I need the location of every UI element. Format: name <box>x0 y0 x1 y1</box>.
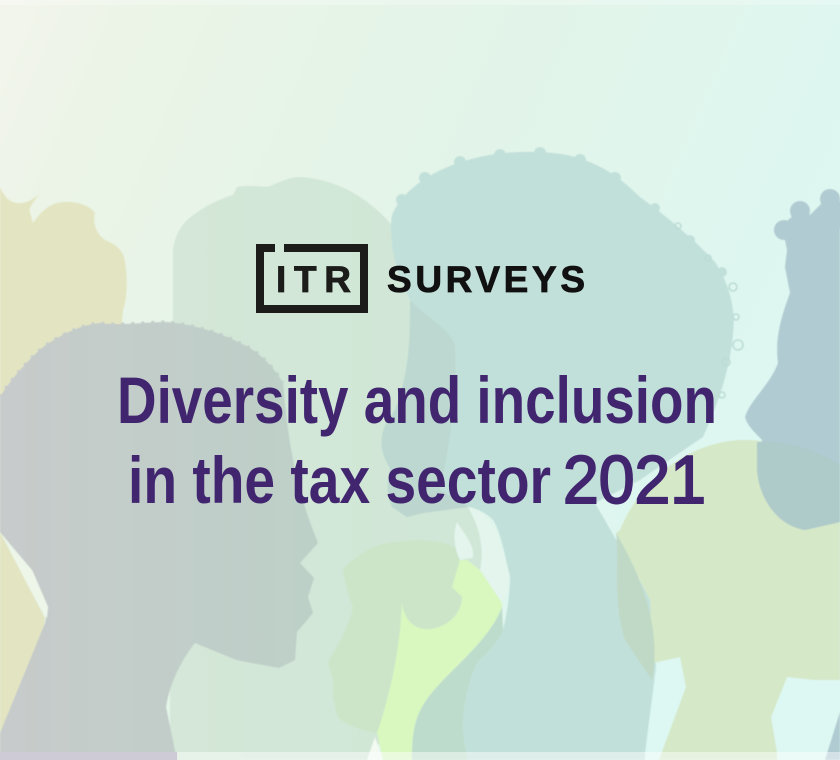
silhouette: blue crown curls <box>774 189 840 240</box>
silhouette: bottom right blue corner <box>825 712 840 760</box>
logo frame <box>260 248 364 309</box>
silhouette: neck overlap <box>412 607 503 760</box>
silhouette: right green lump <box>616 440 840 760</box>
silhouette: white gap by neck <box>468 507 510 603</box>
silhouette: far left body <box>0 532 45 733</box>
silhouette: face overlap <box>382 300 455 517</box>
silhouette: far left hair <box>0 187 127 420</box>
bottom strip <box>0 752 840 760</box>
silhouette: small green face <box>328 540 462 733</box>
silhouette: white wedge under neck <box>367 737 383 760</box>
silhouette: hair bumps <box>396 147 727 277</box>
logo text ITR: ITR <box>276 259 351 300</box>
title line 2: in the tax sector <box>128 443 551 517</box>
silhouette: front gray head <box>0 322 318 760</box>
silhouette: teal curly head <box>382 152 734 760</box>
silhouette: light gap beside neck <box>8 545 48 618</box>
title line 1: Diversity and inclusion <box>117 363 717 437</box>
silhouette: right blue profile <box>745 195 840 530</box>
top strip <box>0 0 840 5</box>
silhouette: textured hair edge <box>0 322 283 397</box>
silhouette: hair curls <box>675 223 743 398</box>
silhouette: left hair overlap on teal <box>616 533 655 680</box>
title year: 2021 <box>563 442 706 518</box>
silhouette: blue over lump <box>757 442 840 530</box>
logo: ITR Surveys <box>260 248 585 309</box>
silhouette: face under chin <box>392 490 468 517</box>
silhouette: back green head <box>170 177 502 760</box>
silhouette: bright green neck <box>377 560 502 760</box>
title <box>117 363 717 518</box>
logo text SURVEYS: SURVEYS <box>387 259 585 300</box>
silhouette: small wedge by hair <box>454 522 473 560</box>
